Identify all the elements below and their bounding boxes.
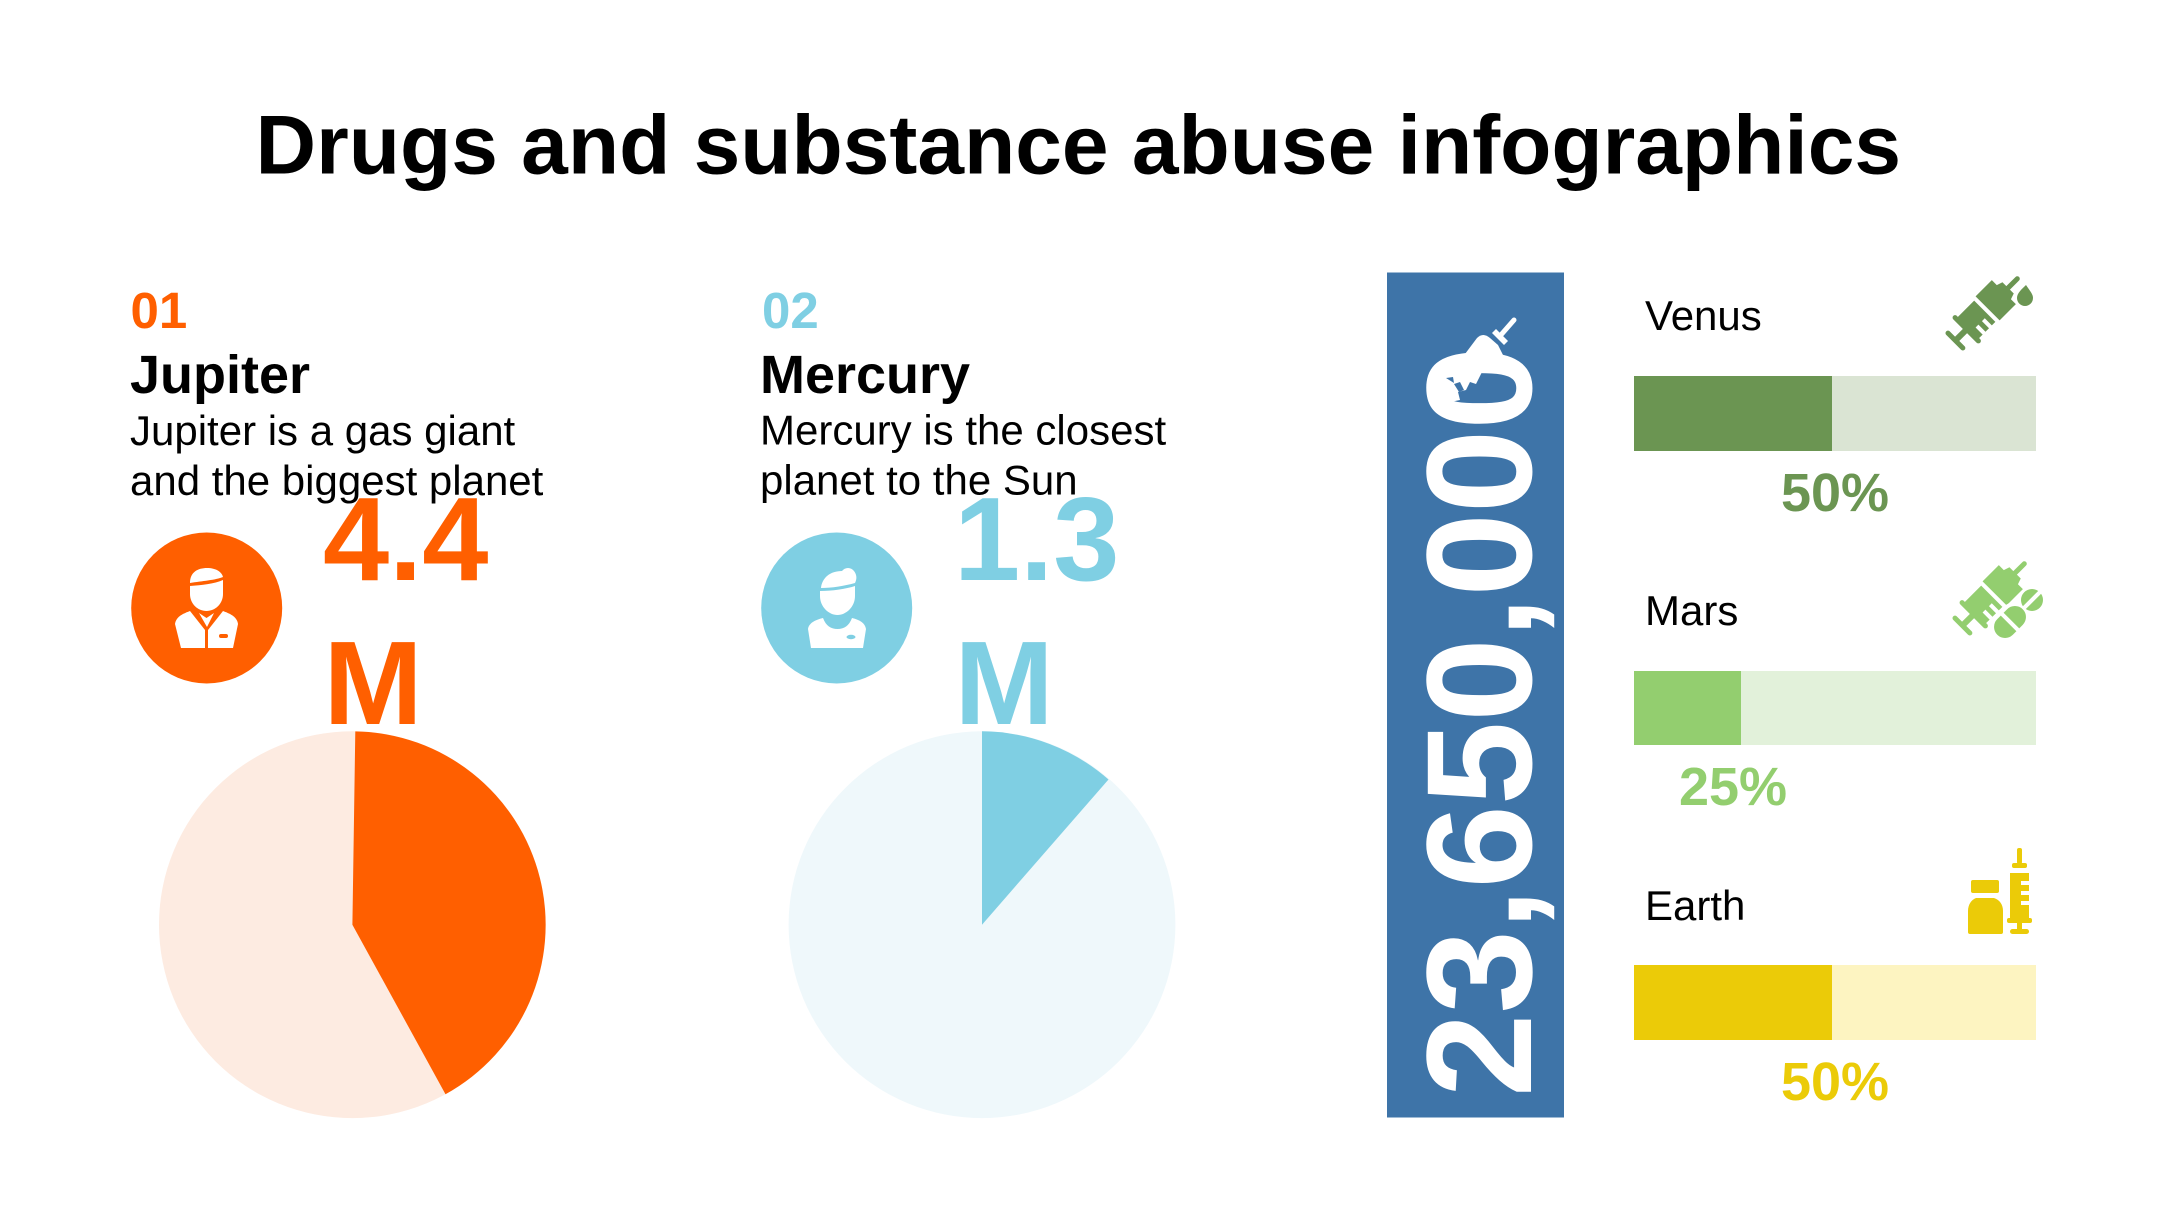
progress bar: Earth 50%: [1634, 965, 2036, 1040]
pie chart: Jupiter: [159, 731, 546, 1118]
panel: Venus: [1634, 265, 2036, 523]
value: 50%: 50%: [1781, 1052, 1889, 1112]
description: Jupiter: and the biggest planet: [130, 457, 544, 504]
icon: man in orange circle: [131, 532, 282, 684]
big number: 4.4 M: M: [324, 617, 423, 750]
icon: syringe with pills: [1947, 550, 2049, 647]
big number: 1.3 M: 1.3: [954, 473, 1119, 606]
panel: Jupiter: [130, 282, 546, 1118]
label: Mars: Mars: [1645, 587, 1738, 634]
panel: Earth: [1634, 848, 2036, 1112]
step number 02: 02: [762, 282, 819, 339]
progress bar: Venus 50%: [1634, 376, 2036, 451]
description: Mercury: planet to the Sun: [760, 456, 1078, 504]
description: Mercury: Mercury is the closest: [760, 406, 1166, 454]
title: Drugs and substance abuse infographics: [256, 97, 1901, 191]
vertical number: 23,650,000: [1395, 346, 1563, 1097]
progress bar: Mars 25%: [1634, 671, 2036, 745]
big number: 1.3 M: [954, 473, 1119, 750]
pie chart: Mercury: [789, 731, 1175, 1118]
description: Mercury: [760, 406, 1166, 504]
value: 25%: 25%: [1679, 757, 1787, 817]
icon: syringe with drop: [1940, 265, 2033, 356]
big number: 4.4 M: [323, 473, 488, 750]
icon: white syringe: [1436, 320, 1514, 405]
description: Jupiter: Jupiter is a gas giant: [130, 407, 516, 454]
step number 01: 01: [130, 282, 187, 339]
heading: Mercury: Mercury: [760, 345, 970, 405]
label: Earth: Earth: [1645, 882, 1745, 929]
heading: Jupiter: Jupiter: [130, 345, 310, 405]
big number: 1.3 M: M: [954, 617, 1054, 750]
icon: vial and syringe: [1968, 848, 2032, 934]
value: 50%: 50%: [1781, 463, 1889, 523]
panel: total figure: [1387, 272, 1564, 1118]
icon: woman in blue circle: [761, 532, 912, 684]
panel: Mars: [1634, 550, 2049, 817]
panel: Mercury: [760, 282, 1175, 1118]
label: Venus: Venus: [1645, 292, 1762, 339]
big number: 4.4 M: 4.4: [323, 473, 488, 606]
blue column: [1387, 272, 1564, 1118]
description: Jupiter: [130, 407, 544, 504]
